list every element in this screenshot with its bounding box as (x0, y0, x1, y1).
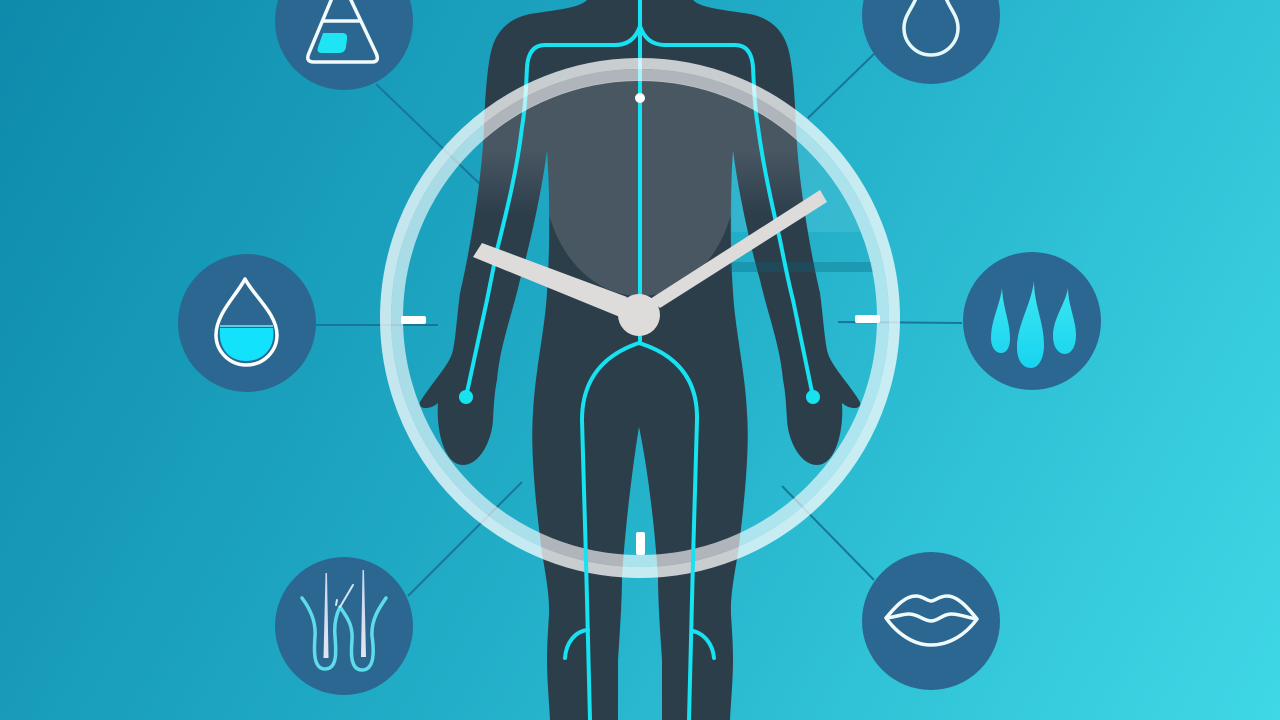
clock hands (473, 190, 827, 336)
icon: lips (862, 552, 1000, 690)
icon: three drops (963, 252, 1101, 390)
clock tick marks (401, 93, 880, 555)
icon: single drop (862, 0, 1000, 84)
dark reflection band (730, 262, 880, 272)
glass reflection on background (732, 140, 861, 232)
chest highlight (478, 80, 802, 296)
human body silhouette (420, 0, 860, 720)
connector lines (316, 54, 962, 596)
clock ring (386, 64, 894, 572)
icon: flask (275, 0, 413, 90)
icon: hair follicles (275, 557, 413, 695)
icon: half-filled drop (178, 254, 316, 392)
upper circulatory lines (466, 0, 813, 397)
hand dots (459, 390, 820, 404)
lower circulatory lines (565, 330, 714, 720)
